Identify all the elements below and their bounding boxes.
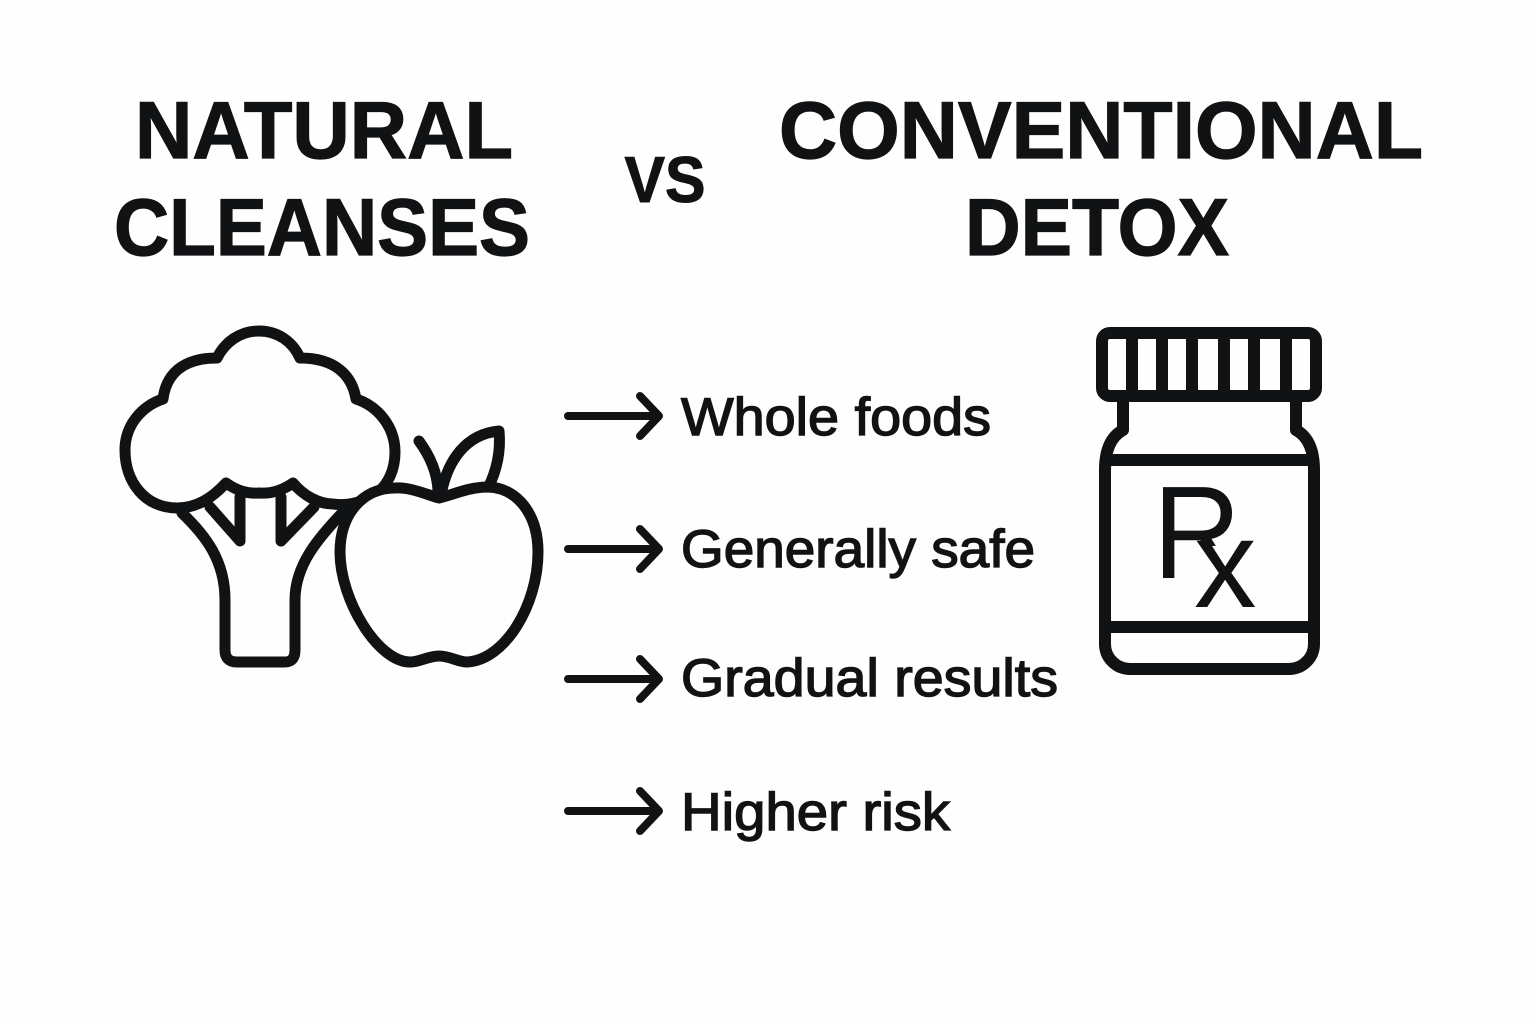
icon: apple	[340, 431, 538, 662]
label: higher risk: Higher risk	[681, 783, 951, 842]
icon: prescription bottle	[1102, 333, 1316, 669]
label: generally safe: Generally safe	[681, 520, 1035, 579]
arrow: gradual results	[568, 659, 659, 699]
title: conventional detox	[779, 86, 1423, 273]
title: conventional detox: CONVENTIONAL	[779, 86, 1423, 176]
label: whole foods: Whole foods	[681, 388, 991, 447]
heading: vs: VS	[624, 143, 706, 216]
arrow: whole foods	[568, 396, 659, 436]
label: gradual results: Gradual results	[681, 649, 1058, 708]
rx symbol: R	[1153, 459, 1241, 606]
title: natural cleanses	[114, 86, 530, 273]
icon: broccoli	[125, 331, 395, 662]
title: natural cleanses: CLEANSES	[114, 183, 530, 273]
rx symbol	[1163, 487, 1256, 607]
title: natural cleanses: NATURAL	[135, 86, 513, 176]
arrow: generally safe	[568, 529, 659, 569]
arrow: higher risk	[568, 791, 659, 831]
title: conventional detox: DETOX	[965, 183, 1229, 273]
rx symbol: x	[1194, 495, 1256, 634]
